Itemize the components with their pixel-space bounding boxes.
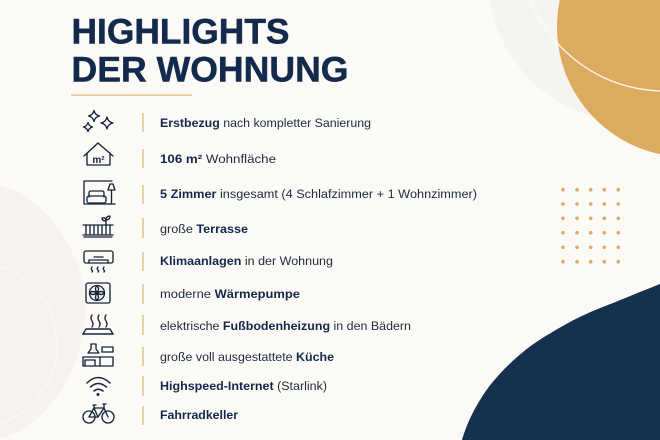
- row: Internet: [87, 376, 327, 396]
- text: Wohnfläche: 106 m² Wohnfläche: [160, 152, 276, 166]
- row: Küche: [83, 344, 334, 366]
- icon: terrace railing with plant: [83, 216, 113, 237]
- icon: kitchen: [83, 344, 113, 366]
- icon: heat pump: [86, 283, 110, 303]
- row: Terrasse: [83, 216, 248, 238]
- icon: sparkles: [84, 110, 113, 132]
- text: Küche: große voll ausgestattete Küche: [160, 350, 334, 364]
- gold circle: [557, 0, 660, 157]
- icon: house with m2: [84, 143, 113, 166]
- text: Klimaanlagen: Klimaanlagen in der Wohnung: [160, 254, 333, 268]
- icon: living room: [84, 181, 115, 204]
- title underline: [71, 94, 192, 96]
- background blob: left beige: [0, 185, 85, 438]
- title: [72, 12, 349, 90]
- text: Fahrradkeller: Fahrradkeller: [160, 408, 238, 422]
- row: Zimmer: [84, 181, 477, 204]
- text: Terrasse: große Terrasse: [160, 222, 248, 236]
- navy wave: [462, 284, 660, 440]
- title: HIGHLIGHTS: [72, 12, 290, 52]
- row: Fahrradkeller: [83, 404, 238, 425]
- row: Fußbodenheizung: [83, 315, 411, 335]
- decorative white arc: [531, 0, 660, 91]
- row: Erstbezug: [84, 110, 371, 132]
- row: Klimaanlagen: [84, 251, 333, 272]
- icon: house with m2: m²: [92, 155, 105, 166]
- icon: bicycle: [83, 404, 114, 423]
- row: Wärmepumpe: [86, 283, 300, 304]
- text: Fußbodenheizung: elektrische Fußbodenheizung in den Bädern: [160, 319, 411, 333]
- icon: air conditioner: [84, 251, 113, 272]
- icon: floor heating: [83, 315, 113, 334]
- dot grid: [561, 188, 620, 264]
- text: Zimmer: 5 Zimmer insgesamt (4 Schlafzimmer + 1 Wohnzimmer): [160, 187, 477, 201]
- title: DER WOHNUNG: [72, 50, 349, 90]
- text: Internet: Highspeed-Internet (Starlink): [160, 379, 327, 393]
- decorative ring: left: [0, 263, 57, 427]
- text: Erstbezug: Erstbezug nach kompletter Sanierung: [160, 116, 371, 130]
- text: Wärmepumpe: moderne Wärmepumpe: [160, 287, 300, 301]
- background blob: top right beige: [490, 0, 660, 118]
- icon: wifi: [87, 378, 110, 396]
- row: Wohnfläche: [84, 143, 276, 168]
